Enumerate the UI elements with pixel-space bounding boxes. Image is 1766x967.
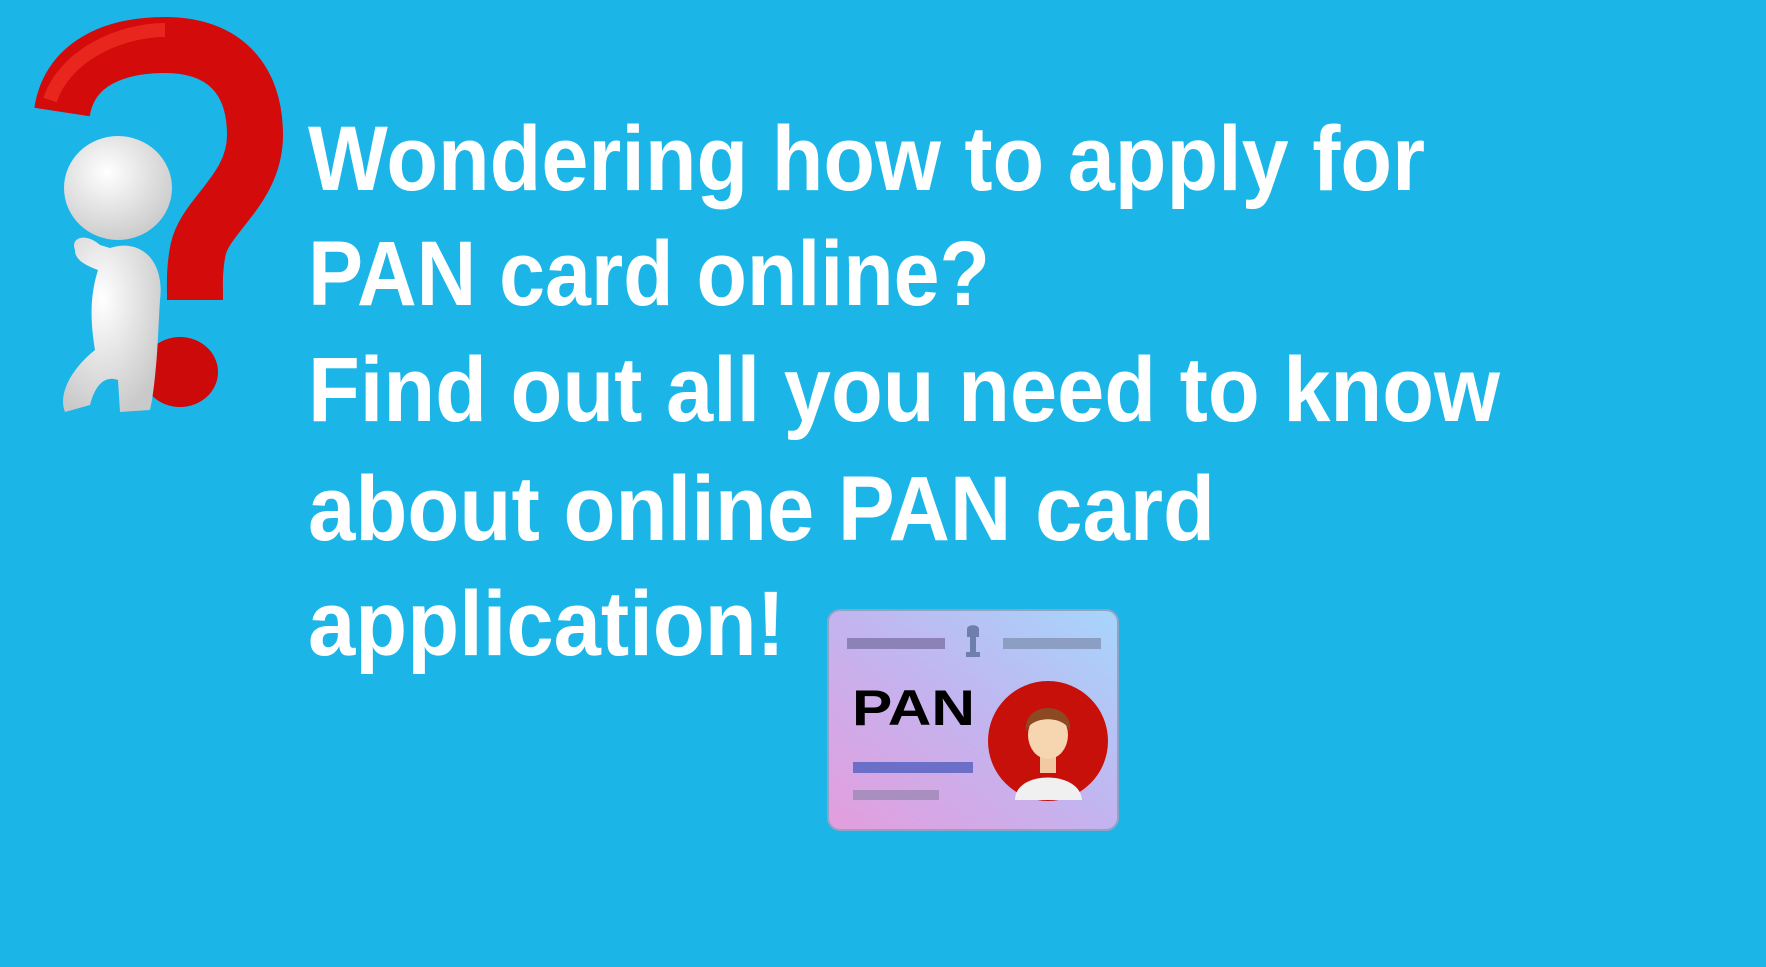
icon: PAN card: PAN (852, 680, 975, 736)
title text: about online PAN card (308, 458, 1215, 560)
icon: question mark with thinking figure (50, 30, 255, 412)
title text: Find out all you need to know (308, 339, 1500, 441)
title text: application! (308, 573, 785, 675)
title text (308, 108, 1500, 675)
title text: Wondering how to apply for (308, 108, 1425, 210)
icon: PAN card (828, 610, 1118, 830)
title text: PAN card online? (308, 223, 990, 325)
